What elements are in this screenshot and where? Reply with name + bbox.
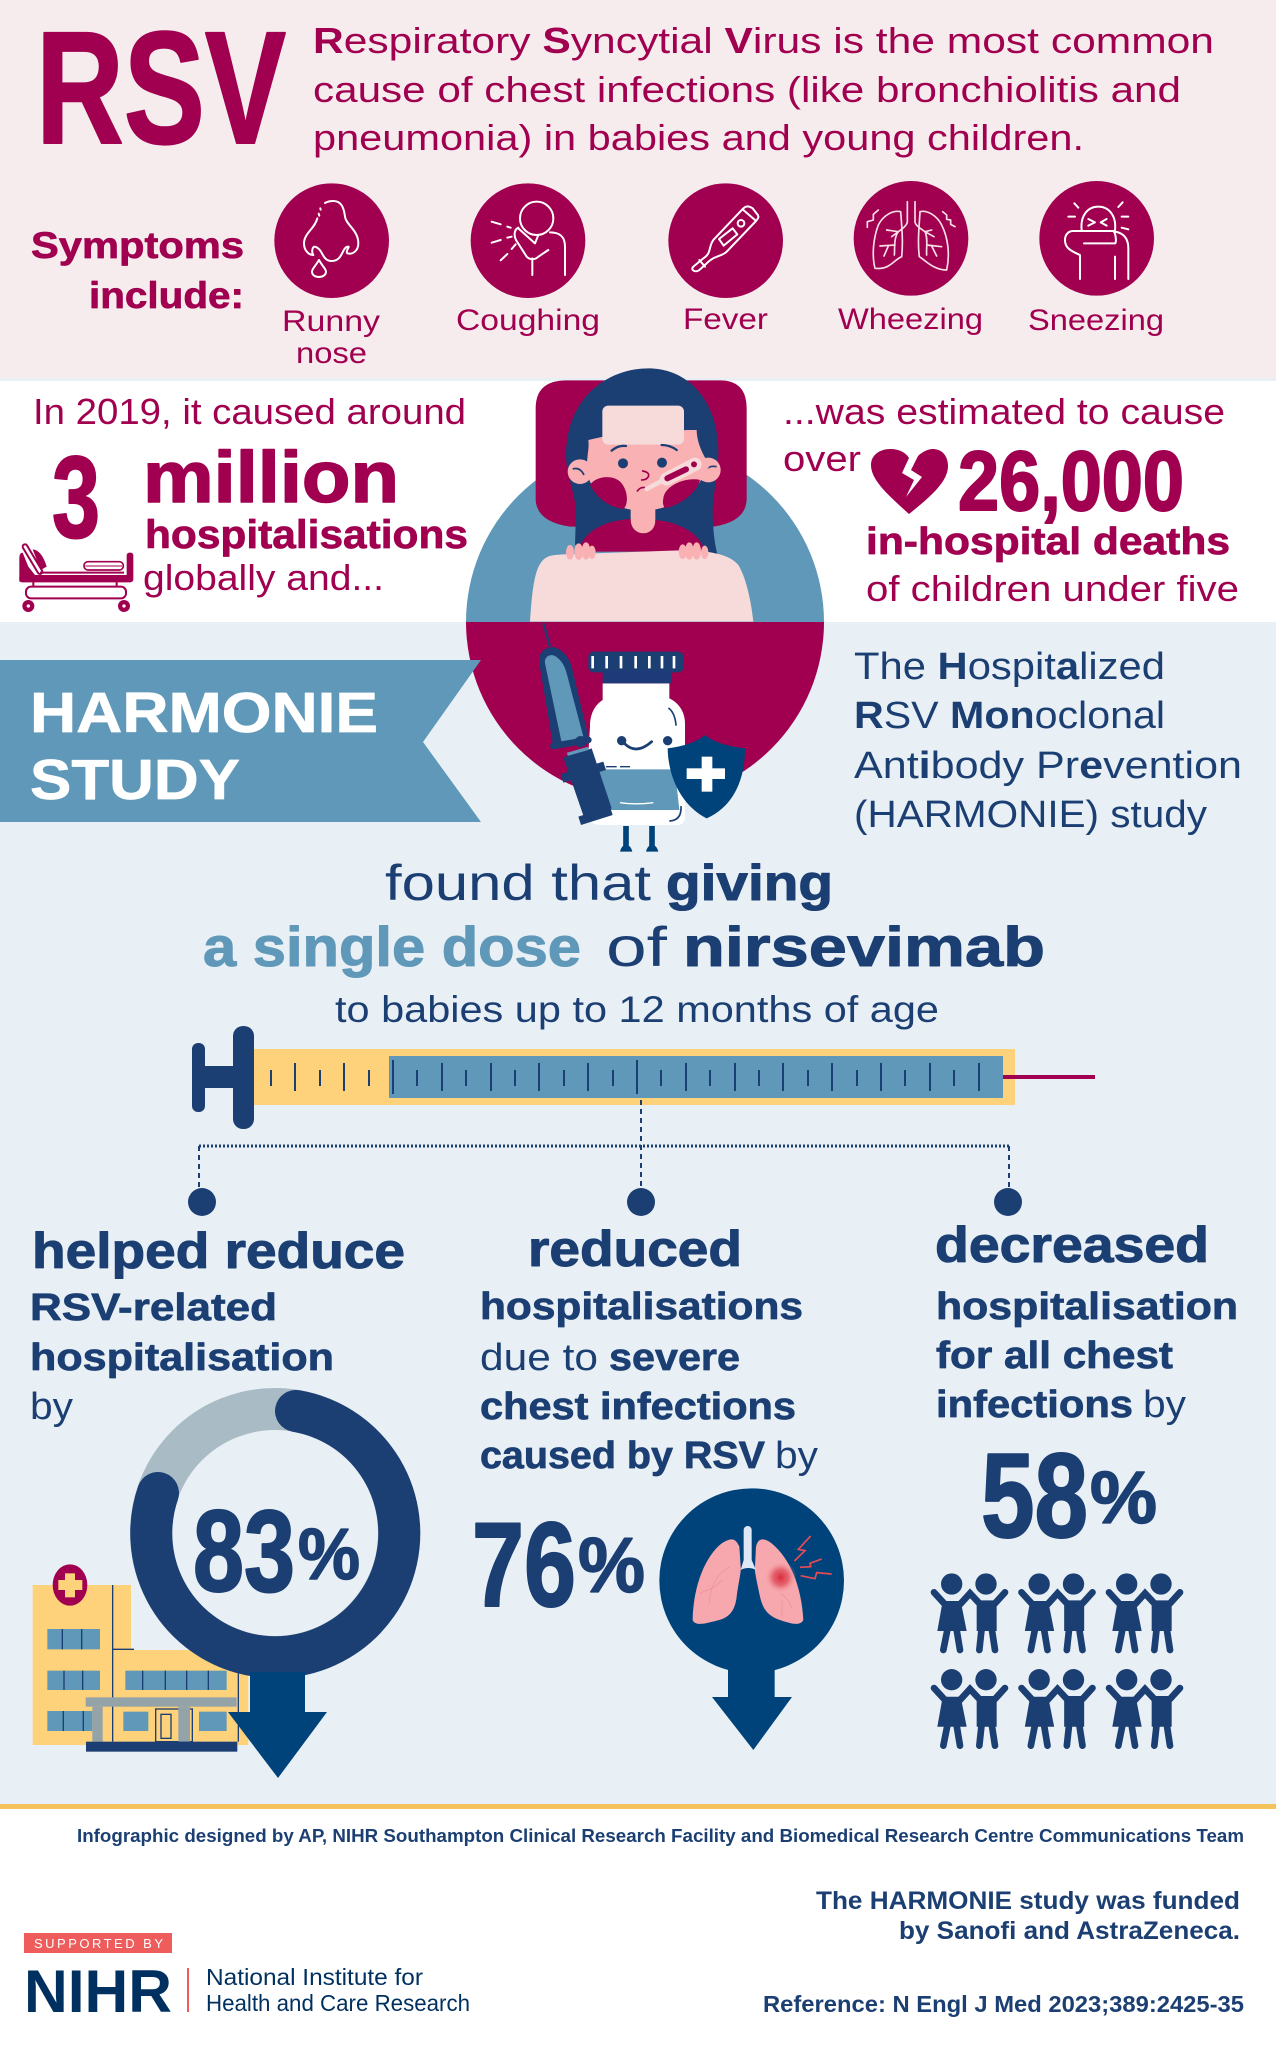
text block: funding <box>816 1887 1240 1945</box>
text block: RSV description: pneumonia) in babies and young children. <box>313 117 1084 158</box>
text: globally and: globally and... <box>143 557 384 598</box>
connector: dotted lines to findings <box>188 1100 1022 1216</box>
finding: all chest infections text: decreased <box>935 1217 1209 1273</box>
credit: designer: Infographic designed by AP, NIHR Southampton Clinical Research Facility and Biomedical Research Centre Communications Team <box>77 1826 1244 1846</box>
finding: reduced RSV hospitalisation text: hospitalisation <box>30 1337 334 1379</box>
text block: RSV description: Respiratory Syncytial Virus is the most common <box>313 20 1214 61</box>
label: sneezing: Sneezing <box>1028 304 1164 337</box>
banner: HARMONIE study: STUDY <box>30 748 240 812</box>
text block: study finding: of <box>606 915 668 978</box>
arrow: down from donut <box>228 1672 327 1778</box>
text block: HARMONIE study name: Antibody Pr evention <box>854 745 1242 787</box>
finding: severe chest infection text: by <box>775 1435 818 1477</box>
icon: broken heart <box>871 449 948 514</box>
logo: NIHR supported by: NIHR <box>24 1958 172 2025</box>
text block: HARMONIE study name <box>854 646 1242 836</box>
finding: severe chest infection text: caused by RSV <box>480 1435 766 1477</box>
icon: groups of children <box>934 1573 1180 1746</box>
label: nose: nose <box>296 337 367 370</box>
number: 76 percent: % <box>578 1521 645 1609</box>
chart: 83 percent donut: 83 <box>193 1486 295 1616</box>
text block: deaths statistic: ...was estimated to cause <box>783 391 1225 432</box>
text block: study finding: to babies up to 12 months of age <box>335 989 939 1030</box>
heading: symptoms include <box>31 225 244 316</box>
text block: deaths statistic <box>783 391 1239 609</box>
logo: NIHR supported by: National Institute for <box>206 1964 423 1990</box>
panel: RSV introduction and symptoms <box>0 0 1276 381</box>
text block: study finding <box>203 855 1045 1030</box>
icon: runny nose <box>274 183 389 298</box>
icon: fever thermometer <box>668 183 783 298</box>
icon: wheezing lungs <box>854 181 968 296</box>
finding: all chest infections text: by <box>1143 1384 1186 1426</box>
text: of children under five: of children under five <box>866 568 1239 609</box>
illustration: sick child in bed <box>530 368 753 622</box>
chart: 83 percent donut <box>151 1409 399 1657</box>
finding: all chest infections text <box>935 1217 1238 1426</box>
chart: 83 percent donut: % <box>298 1515 360 1595</box>
text block: RSV description <box>313 20 1214 158</box>
divider: footer rule <box>0 1804 1276 1809</box>
label: fever: Fever <box>683 303 768 336</box>
finding: severe chest infection text: severe <box>609 1337 740 1379</box>
text block: study finding: a single dose <box>203 915 581 978</box>
icon: sneezing <box>1039 181 1154 296</box>
text block: study finding: giving <box>666 855 833 911</box>
text block: HARMONIE study name: The Hospitalized <box>854 646 1165 688</box>
number word: million: million <box>143 438 399 518</box>
finding: severe chest infection text: reduced <box>528 1221 742 1277</box>
number: 76 percent: 76 <box>472 1498 576 1632</box>
text block: study finding: nirsevimab <box>683 915 1045 978</box>
logo: NIHR supported by: Health and Care Research <box>206 1990 470 2016</box>
finding: reduced RSV hospitalisation text: RSV-related <box>30 1287 277 1329</box>
text block: hospitalisations statistic: In 2019, it caused around <box>33 391 466 432</box>
finding: reduced RSV hospitalisation text: by <box>30 1386 73 1428</box>
text block: RSV description: cause of chest infections (like bronchiolitis and <box>313 69 1181 110</box>
finding: all chest infections text: hospitalisation <box>936 1286 1238 1328</box>
text block: hospitalisations statistic <box>33 391 468 598</box>
banner: HARMONIE study <box>0 660 481 822</box>
text block: funding: The HARMONIE study was funded <box>816 1887 1240 1915</box>
text: reference: Reference: N Engl J Med 2023;389:2425-35 <box>763 1991 1244 2017</box>
finding: severe chest infection text <box>480 1221 818 1477</box>
finding: severe chest infection text: chest infections <box>480 1386 796 1428</box>
label: coughing: Coughing <box>456 304 600 337</box>
text: hospitalisations: hospitalisations <box>145 513 468 557</box>
text block: HARMONIE study name: RSV Monoclonal <box>854 695 1165 737</box>
text block: study finding: found that <box>385 855 651 911</box>
finding: all chest infections text: for all chest <box>936 1335 1173 1377</box>
text block: deaths statistic: over <box>783 438 861 479</box>
finding: reduced RSV hospitalisation text <box>30 1223 405 1428</box>
panel: HARMONIE study background <box>0 622 1276 1804</box>
text: in-hospital deaths: in-hospital deaths <box>866 521 1230 563</box>
text block: funding: by Sanofi and AstraZeneca. <box>899 1917 1240 1945</box>
finding: severe chest infection text: due to <box>480 1337 598 1379</box>
heading: symptoms include: Symptoms <box>31 225 244 266</box>
heading: symptoms include: include: <box>89 275 244 316</box>
number: 26,000: 26,000 <box>958 434 1184 528</box>
number: 58 percent: 58 <box>981 1429 1088 1563</box>
banner: HARMONIE study: HARMONIE <box>30 681 378 745</box>
label: runny nose: Runny <box>282 305 380 338</box>
finding: severe chest infection text: hospitalisations <box>480 1286 803 1328</box>
logo: NIHR supported by <box>24 1933 470 2025</box>
number: 58 percent: % <box>1090 1456 1157 1539</box>
finding: all chest infections text: infections <box>936 1384 1133 1426</box>
graphic: split circle background <box>466 443 824 801</box>
icon: hospital bed <box>19 547 133 612</box>
illustration: vial mascot with syringe and shield <box>539 623 745 852</box>
illustration: syringe <box>192 1026 1095 1129</box>
number: 3: 3 <box>52 432 100 562</box>
text block: HARMONIE study name: (HARMONIE) study <box>854 794 1207 836</box>
icon: coughing <box>471 183 585 298</box>
logo: NIHR supported by: SUPPORTED BY <box>34 1936 163 1951</box>
title: RSV: RSV <box>36 0 286 177</box>
finding: reduced RSV hospitalisation text: helped reduce <box>32 1223 405 1279</box>
label: wheezing: Wheezing <box>838 303 983 336</box>
icon: lungs with arrow <box>659 1488 844 1750</box>
illustration: hospital building <box>33 1564 248 1752</box>
